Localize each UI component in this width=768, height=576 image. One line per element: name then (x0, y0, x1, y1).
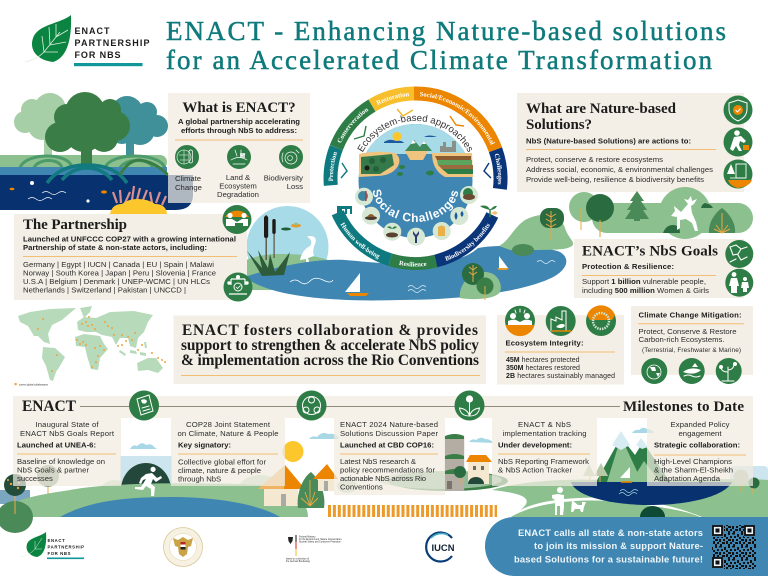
ring segment: biodiversity benefits (434, 212, 498, 268)
icon: freshwater (679, 358, 705, 384)
logo: IUCN (426, 532, 455, 562)
ring segment: social/economic/environmental: Social/Economic/Environmental (420, 92, 495, 146)
illustration: hills and trees by lake (460, 208, 573, 300)
ring segment: conservation: Conserveration (338, 108, 369, 142)
left lake (60, 497, 280, 517)
label: land degradation: Degradation (217, 190, 259, 199)
QR code (712, 525, 756, 569)
water bands (0, 167, 167, 175)
callout: call to action (485, 517, 768, 576)
panel: What is ENACT?: efforts through NbS to address: (181, 126, 297, 135)
panel: What is ENACT?: A global partnership accelerating (178, 117, 300, 126)
shore band (0, 155, 167, 169)
icon: leaf (25, 15, 71, 62)
infographic: ecosystem-based approaches wheel (324, 86, 508, 270)
right island with fields (432, 153, 473, 177)
milestone: COP28 joint statement: climate, nature & people (178, 466, 261, 475)
timeline line (80, 406, 620, 408)
icon: land degradation (227, 145, 251, 169)
left trees (37, 465, 59, 502)
chevrons (341, 109, 491, 178)
logo: IUCN: IUCN (432, 542, 455, 553)
icon: person walking dog (552, 487, 586, 515)
icon: runner (135, 467, 162, 496)
small islets (397, 165, 434, 176)
callout: call to action: to join its mission & support Nature- (534, 540, 703, 551)
icon: shield (724, 96, 752, 124)
panel: What are Nature-based Solutions? (517, 93, 752, 192)
logo: ENACT Partnership for NbS: PARTNERSHIP (74, 38, 150, 48)
milestone: COP28 joint statement: through NbS (178, 474, 221, 484)
logo: ENACT footer: FOR NBS (48, 551, 71, 556)
panel: The Partnership: Netherlands | Switzerland | Pakistan | UNCCD | (23, 286, 186, 294)
milestone: implementation tracking: implementation tracking (502, 429, 586, 438)
label: climate change: Change (175, 183, 202, 192)
milestone: expanded policy engagement: High-Level Champions (654, 457, 732, 466)
panel: What are Nature-based Solutions?: Solutions? (526, 117, 592, 133)
panel: ENACT fosters collaboration (174, 316, 486, 384)
milestone: expanded policy engagement: Strategic collaboration: (654, 441, 740, 450)
panel: Climate Change Mitigation: Climate Change Mitigation: (638, 311, 742, 320)
milestone: state of goals report: ENACT NbS Goals Report (20, 429, 115, 438)
panel: Ecosystem Integrity: Ecosystem Integrity: (506, 338, 584, 348)
milestone: implementation tracking: NbS Reporting Framework (498, 457, 589, 466)
milestone: state of goals report: Launched at UNEA-6: (17, 441, 96, 450)
icon: city and forest (724, 160, 752, 188)
milestone: ENACT 2024 discussion paper: Solutions Discussion Paper (340, 429, 438, 438)
panel: What are Nature-based Solutions?: Protect, conserve & restore ecosystems (526, 155, 663, 164)
icon: terrestrial (641, 358, 667, 384)
background pale hills (101, 475, 357, 505)
sun and clouds (392, 132, 402, 141)
milestone: ENACT 2024 discussion paper: actionable NbS across Rio (340, 474, 426, 483)
milestone: expanded policy engagement: Expanded Policy (670, 420, 730, 429)
logo: German federal ministry: the German Bundestag (286, 560, 310, 563)
panel: timeline backdrop (13, 396, 753, 495)
icon: stakeholders (224, 272, 252, 302)
panel: Ecosystem Integrity: 45M hectares protected (506, 357, 580, 364)
egret (300, 236, 316, 262)
panel: The Partnership: Launched at UNFCCC COP27 with a growing international (23, 234, 236, 244)
panel: Climate Change Mitigation (631, 306, 753, 384)
icon: ecosystem hands (505, 306, 535, 336)
milestone: ENACT 2024 discussion paper (340, 420, 438, 492)
icon: person planting (724, 128, 752, 156)
illustration: forest with deer (569, 187, 753, 239)
panel: The Partnership: Norway | South Korea | Japan | Peru | Slovenia | France (23, 268, 216, 278)
label: biodiversity loss: Loss (287, 182, 303, 191)
panel: Climate Change Mitigation: Carbon-rich Ecosystems. (638, 335, 724, 344)
icon: plant hands (454, 390, 484, 420)
illustration: heron pond (229, 206, 566, 300)
panel: What are Nature-based Solutions?: Provide well-being, resilience & biodiversity benefits (526, 175, 704, 184)
panel: goals box: Protection & Resilience: (582, 262, 674, 271)
milestone: COP28 joint statement: COP28 Joint Statement (186, 420, 271, 429)
icon: people on ring (337, 206, 352, 214)
logo: German federal ministry: based on a decision of (286, 558, 309, 560)
illustration: timeline landscape (0, 428, 768, 533)
logo: ENACT footer: PARTNERSHIP (48, 544, 85, 550)
logo: ENACT Partnership for NbS: FOR NBS (74, 50, 120, 60)
icon: orange wreath (586, 305, 616, 336)
map: global collaborators (14, 306, 166, 386)
icon: report (129, 390, 159, 420)
panel: goals box: Support 1 billion vulnerable people, (582, 277, 706, 286)
icon: joint statement (296, 390, 326, 420)
castle (440, 141, 456, 152)
logo: ENACT footer: ENACT (48, 538, 65, 543)
ring segment: resilience (388, 254, 438, 270)
central disc (358, 124, 473, 238)
panel: What are Nature-based Solutions?: NbS (Nature-based Solutions) are actions to: (526, 136, 691, 146)
milestone: implementation tracking: & NbS Action Tracker (498, 466, 572, 474)
callout: call to action: based Solutions for a sustainable future! (514, 554, 703, 564)
timeline heading: ENACT: ENACT (22, 398, 77, 415)
milestone: state of goals report: Inaugural State of (36, 420, 99, 429)
ring segment: protection: Protection (328, 152, 338, 182)
ring segment: challenges: Challenges (494, 154, 502, 184)
navy lake (571, 482, 732, 505)
panel: Climate Change Mitigation: Protect, Conserve & Restore (638, 327, 736, 336)
label: biodiversity loss: Biodiversity (264, 174, 303, 182)
wheat row (328, 505, 497, 517)
panel: goals box (574, 239, 753, 298)
milestone: ENACT 2024 discussion paper: Conventions (340, 482, 383, 492)
sailboat on navy lake (620, 467, 632, 482)
panel: What are Nature-based Solutions?: What are Nature-based (526, 101, 677, 117)
logo: ENACT Partnership for NbS: ENACT (74, 26, 110, 36)
cattails (247, 215, 290, 276)
icon: marine (716, 358, 742, 384)
callout: call to action: ENACT calls all state & non-state actors (518, 527, 703, 538)
panel: The Partnership: Germany | Egypt | IUCN | Canada | EU | Spain | Malawi (23, 260, 214, 269)
map legend: current global collaborators (19, 384, 49, 386)
icon: handshake (222, 205, 252, 234)
logo: German federal ministry: Nuclear Safety and Consumer Protection (299, 540, 341, 544)
panel: What is ENACT? (168, 93, 310, 203)
milestone: implementation tracking: Under development: (498, 441, 572, 450)
panel: The Partnership: The Partnership (23, 217, 127, 233)
pale trees (583, 463, 760, 488)
panel: What is ENACT?: What is ENACT? (182, 100, 296, 116)
logo: ENACT footer (21, 532, 85, 559)
milestone: implementation tracking (498, 420, 590, 474)
milestone: expanded policy engagement: & the Sharm-El-Sheikh (654, 466, 733, 474)
ring segment: human well-being (332, 210, 392, 266)
dark hump near callout (640, 506, 665, 517)
mountains (405, 140, 432, 151)
ring segment: resilience: Resilience (398, 260, 426, 266)
ring segment: restoration (368, 86, 414, 112)
label: land degradation: Land & (226, 173, 250, 182)
label: land degradation: Ecosystem (219, 182, 257, 190)
dark mangrove tree (45, 92, 130, 165)
coral (110, 186, 167, 214)
ring segment: protection (324, 145, 343, 186)
title (166, 16, 726, 75)
panel: Ecosystem Integrity: 350M hectares restored (506, 365, 580, 372)
lily pads (281, 222, 301, 230)
clouds (130, 428, 654, 449)
icon: woman and girl (725, 269, 753, 297)
icon: sprout on ring (480, 206, 498, 217)
label: climate change: Climate (175, 174, 201, 183)
milestone: state of goals report: NbS Goals & partner (17, 466, 89, 474)
title: ENACT - Enhancing Nature-based solutions (166, 16, 726, 46)
milestone: COP28 joint statement: Collective global effort for (178, 458, 266, 466)
milestone: ENACT 2024 discussion paper: Latest NbS research & (340, 457, 416, 466)
panel: Ecosystem Integrity (497, 305, 624, 384)
milestone: expanded policy engagement (654, 420, 746, 483)
panel: goals box: including 500 million Women & Girls (582, 286, 709, 295)
panel: The Partnership: U.S.A | Belgium | Denmark | UNEP-WCMC | UN HLCs (23, 277, 210, 286)
sun (282, 441, 304, 462)
lower tree (460, 263, 501, 300)
panel: Climate Change Mitigation: (Terrestrial, Freshwater & Marine) (642, 347, 741, 354)
lake (245, 246, 566, 300)
logo: German federal ministry (286, 535, 342, 563)
sky bands (0, 456, 768, 504)
fish and waves (10, 181, 107, 203)
panel: The Partnership: Partnership of state & non-state actors, including: (23, 243, 207, 252)
milestone: expanded policy engagement: engagement (678, 429, 722, 438)
village (258, 464, 338, 508)
waves right (408, 260, 555, 292)
panel: What are Nature-based Solutions?: Address social, economic, & environmental challenges (526, 165, 713, 174)
panel: ENACT fosters collaboration: support to strengthen & accelerate NbS policy (181, 337, 479, 354)
left island with trees (359, 152, 399, 177)
waves (290, 278, 333, 284)
icon: factory with leaf (546, 306, 576, 336)
teal mangrove tree (110, 96, 168, 160)
text: ecosystem-based approaches: Ecosystem-based approaches (357, 115, 472, 152)
sailboat (497, 256, 509, 270)
dark hump with runner (121, 463, 171, 517)
panel: Ecosystem Integrity: 2B hectares sustainably managed (506, 373, 615, 380)
panel: ENACT fosters collaboration: & implementation across the Rio Conventions (181, 352, 479, 369)
sailboat (345, 273, 369, 296)
milestone: ENACT 2024 discussion paper: policy recommendations for (340, 466, 435, 474)
milestone: implementation tracking: ENACT & NbS (518, 420, 571, 429)
ring segment: human well-being: Human well-being (340, 222, 380, 260)
tree with wheat (540, 208, 564, 240)
logo: German federal ministry: for the Environment, Nature Conservation, (299, 538, 342, 541)
hill (229, 254, 345, 290)
town hill and building (378, 434, 508, 491)
light mangrove tree (14, 93, 74, 155)
text: social challenges: Social Challenges (372, 190, 458, 222)
ring segment: biodiversity benefits: Biodiversity benefits (444, 224, 490, 261)
icon: biodiversity loss (279, 145, 303, 169)
ring segment: conservation (330, 100, 376, 150)
logo: German federal ministry: Federal Ministry (299, 536, 316, 538)
title: for an Accelerated Climate Transformation (166, 45, 712, 75)
mountains (596, 431, 670, 482)
icons: social challenge badges (355, 186, 478, 246)
ring segment: challenges (488, 147, 508, 190)
left foreground tree (0, 474, 33, 533)
milestone: COP28 joint statement: on Climate, Nature & People (178, 429, 278, 438)
right hills (492, 479, 768, 517)
panel: The Partnership (14, 205, 252, 302)
logo: Egypt ministry seal (164, 528, 202, 566)
milestone: state of goals report: Baseline of knowledge on (17, 457, 105, 466)
milestone: expanded policy engagement: Adaptation Agenda (654, 474, 721, 483)
logo: ENACT Partnership for NbS (25, 15, 150, 66)
trees (581, 191, 735, 237)
panel: ENACT fosters collaboration: ENACT fosters collaboration & provides (182, 322, 478, 339)
milestone: ENACT 2024 discussion paper: Launched at CBD COP16: (340, 441, 434, 450)
timeline heading: Milestones to Date: Milestones to Date (623, 399, 744, 415)
panel: goals box: ENACT’s NbS Goals (582, 244, 718, 260)
milestone: state of goals report (17, 420, 116, 483)
icon: climate change (175, 145, 199, 169)
main left hill (0, 483, 308, 517)
milestone: COP28 joint statement: Key signatory: (178, 441, 231, 450)
milestone: state of goals report: successes (17, 474, 53, 483)
ring segment: restoration: Restoration (376, 92, 410, 105)
icon: leaping deer (671, 196, 698, 231)
icon: joined hands (725, 240, 753, 268)
milestone: ENACT 2024 discussion paper: ENACT 2024 Nature-based (340, 420, 438, 429)
illustration: mangrove trees and water (0, 92, 193, 214)
milestone: COP28 joint statement (178, 420, 278, 484)
